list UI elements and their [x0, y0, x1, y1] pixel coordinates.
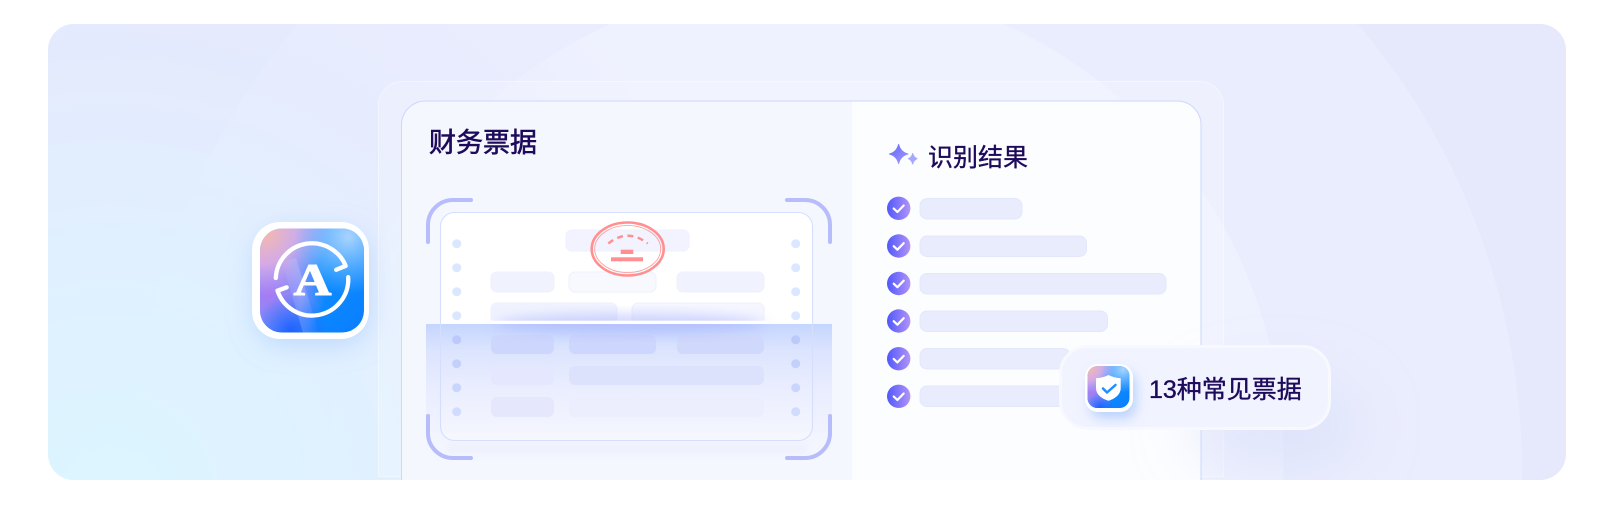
upper field placeholders [491, 230, 764, 323]
badge glow [1199, 422, 1325, 462]
scan corner brackets [428, 200, 830, 458]
app icon: translate A [252, 222, 369, 344]
panel: financial document side [402, 101, 852, 480]
outer glass frame [378, 82, 1224, 476]
results list [887, 197, 1166, 408]
heading: 识别结果: 识别结果 [928, 144, 1028, 172]
panel: recognition results side [852, 101, 1201, 480]
background: blue glow [48, 203, 401, 480]
heading: 财务票据: 财务票据 [429, 128, 537, 158]
scan light band [426, 212, 832, 455]
icon: sparkles [890, 144, 917, 164]
scanned perforation dots [452, 335, 800, 416]
result row 1 [887, 197, 1022, 220]
result row 6 [887, 385, 1070, 408]
result row 3 [887, 272, 1166, 295]
badge: 13种常见票据: 13种常见票据 [1149, 376, 1302, 404]
result row 2 [887, 234, 1086, 258]
scanned field placeholders [491, 335, 764, 417]
main card [402, 101, 1201, 480]
upper perforation dots [452, 239, 800, 320]
red stamp [592, 222, 664, 276]
background: outer concentric ring [134, 24, 1522, 480]
letter A: A [294, 254, 332, 305]
badge shield icon [1085, 364, 1136, 418]
scan area [426, 200, 832, 458]
background: inner concentric ring [330, 24, 1284, 480]
document sheet [440, 212, 812, 440]
badge: 13种常见票据 [1060, 346, 1330, 428]
result row 5 [887, 347, 1070, 370]
result row 4 [887, 309, 1108, 333]
circular arrows [276, 243, 348, 316]
